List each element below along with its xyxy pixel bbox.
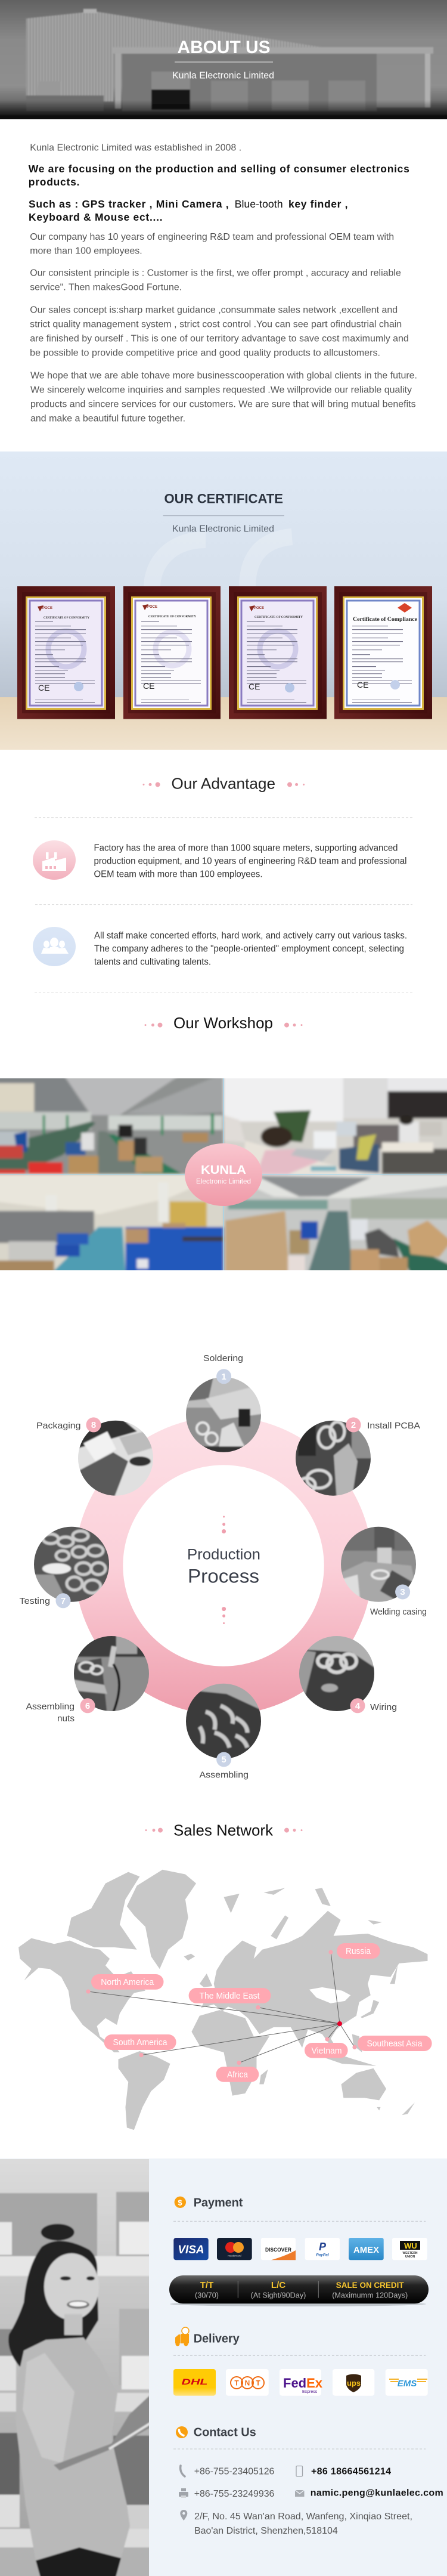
badges: step numbers: 1 [221,1372,226,1382]
smile [67,2300,89,2309]
heading: our workshop [144,1014,303,1032]
icon: mail [295,2490,304,2497]
panel: payment [169,2196,429,2306]
logo: tnt [226,2369,269,2396]
text block: staff [94,931,407,967]
connection lines [88,1952,355,2063]
logo: fedex: FedEx [283,2376,323,2391]
badges: step numbers: 7 [61,1596,66,1606]
heading: our advantage: Our Advantage [172,774,275,792]
badges: step numbers: 2 [351,1420,356,1430]
logo: ems: EMS [398,2379,417,2389]
terms bar: (At Sight/90Day) [251,2291,306,2300]
glow dividers [0,1078,447,1270]
labels: step names: Assembling [26,1702,74,1712]
certificate frame 4: CE [357,680,368,689]
region labels: South America [113,2038,167,2048]
text block: company introduction: and make a beautiful future together. [30,413,185,423]
card: paypal: P [319,2241,327,2253]
text block: company introduction: Our sales concept is:sharp market guidance ,consummate sales network ,excellent and [30,305,398,316]
card: visa [173,2238,209,2260]
logo: dhl: DHL [181,2377,207,2386]
arm and clipboard [54,2395,149,2470]
logo: dhl [173,2369,216,2396]
text block: factory: Factory has the area of more than 1000 square meters, supporting advanced [94,843,398,853]
icon: telephone [181,2466,185,2476]
card: discover: DISCOVER [265,2247,291,2253]
icon: location pin [180,2510,187,2521]
center title: production process: Process [188,1566,259,1587]
logo: ems [386,2369,428,2396]
photo step 2: install pcba [296,1421,371,1496]
text block: company introduction: be possible to provide competitive price and good quality products to allcustomers. [30,348,380,358]
badges: step numbers: 4 [355,1701,361,1711]
certificate frame 2: CE [143,681,154,691]
certificate frame 1 [17,586,115,719]
photo step 1: soldering [186,1378,261,1452]
certificate frame 1: CERTIFICATE OF CONFORMITY [44,617,89,620]
region labels: Russia [346,1947,371,1956]
shirt [16,2337,130,2560]
logo: fedex: Express [302,2390,318,2394]
region dots [86,1950,357,2065]
icon: people [33,927,76,966]
text block: company introduction: We hope that we are able tohave more businesscooperation with global clients in the future. [30,371,417,381]
card: mastercard [217,2238,252,2260]
terms bar: SALE ON CREDIT [336,2280,404,2290]
text block: staff: The company adheres to the "people-oriented" employment concept, selecting [94,944,404,954]
terms bar: T/T [200,2280,213,2290]
heading: payment: Payment [194,2196,243,2209]
face [44,2253,99,2320]
card: amex: AMEX [353,2245,379,2255]
certificate frame 1: CE [38,683,49,692]
terms bar [169,2275,429,2306]
icon: delivery truck [175,2327,189,2346]
photo: warehouse [0,1174,224,1273]
photo: assembly line [0,1074,224,1174]
text block: factory: production equipment, and 10 years of engineering R&D team and professional [94,856,406,867]
region labels: Vietnam [311,2046,342,2056]
text block: company introduction: key finder , [288,198,348,210]
certificate frame 3: CE [249,682,260,691]
heading: our advantage [143,774,305,792]
card: western union [392,2238,427,2260]
text block: company introduction: Keyboard & Mouse ect.... [29,211,163,223]
icon: factory [33,840,76,880]
ring [74,1417,372,1715]
shelves and boxes [0,2192,155,2576]
logo: tnt: T [256,2379,260,2387]
icon: mobile [296,2466,303,2476]
photo step 3: welding casing [341,1527,416,1602]
text block: factory: OEM team with more than 100 employees. [94,870,262,880]
heading: contact us: Contact Us [194,2426,256,2439]
labels: step names: Install PCBA [367,1421,420,1431]
hair [8,2224,98,2367]
logo badge: kunla: KUNLA [201,1164,246,1177]
text: email: namic.peng@kunlaelec.com [311,2488,443,2498]
icon: fax [179,2488,188,2498]
card: western union: WU [404,2241,417,2250]
logo: ups: ups [347,2379,361,2388]
header banner: about us [0,0,447,125]
text block: company introduction: Kunla Electronic Limited was established in 2008 . [30,143,241,153]
photo: woman with clipboard [0,2153,155,2576]
region labels: Southeast Asia [367,2039,423,2049]
text block: company introduction: Our consistent principle is : Customer is the first, we offer prompt , accuracy and reliable [30,268,401,278]
icon: contact phone [176,2426,188,2438]
certificate frame 4 [334,586,432,719]
text: address: Bao'an District, Shenzhen,518104 [194,2526,338,2536]
logo: tnt: T [234,2379,239,2387]
labels: step names [19,1353,427,1780]
text block: company introduction: Such as : GPS tracker , Mini Camera , [29,198,229,210]
logo badge: kunla [185,1143,262,1206]
text block: company introduction: strict quality management system , strict cost control .You can see part ofindustrial chain [30,320,402,330]
panel: contact us [173,2426,443,2536]
text: address: 2/F, No. 45 Wan'an Road, Wanfeng, Xinqiao Street, [194,2512,412,2522]
text block: staff: All staff make concerted efforts, hard work, and actively carry out various tasks. [94,931,407,941]
region labels: The Middle East [199,1991,260,2001]
badges: step numbers: 3 [400,1587,405,1597]
panel: our certificate [0,452,447,750]
photo step 8: packaging [78,1421,153,1496]
labels: step names: Assembling [199,1770,249,1780]
text block: company introduction: We are focusing on the production and selling of consumer electronics [29,163,409,175]
text block: company introduction: Our company has 10 years of engineering R&D team and professional OEM team with [30,232,394,242]
subtitle: company name: Kunla Electronic Limited [172,70,274,81]
certificate frame 2: POCE [147,605,157,609]
card: amex [349,2238,384,2260]
icon: payment [175,2197,186,2208]
card: mastercard: mastercard [228,2255,241,2257]
terms bar: (Maximumm 120Days) [332,2291,408,2300]
certificate frame 4: Certificate of Compliance [353,617,417,623]
badges: step numbers: 6 [85,1701,90,1711]
watermark: large CC letters [152,537,292,587]
photo step 4: wiring [299,1636,374,1711]
panel: footer background [0,2158,447,2576]
icon: payment: $ [178,2198,182,2207]
logo badge: kunla: Electronic Limited [196,1177,251,1185]
labels: step names: Welding casing [370,1607,427,1617]
labels: step names: Soldering [203,1353,243,1363]
labels: step names: nuts [57,1714,74,1724]
photo collage: workshop [0,1074,447,1273]
text: telephone: +86-755-23405126 [194,2467,274,2477]
text block: company introduction: We sincerely welcome inquiries and samples requested .We willprovide our reliable quality [30,385,412,395]
photo step 5: assembling [186,1683,261,1758]
heading: our workshop: Our Workshop [173,1014,273,1032]
labels: step names: Wiring [370,1702,397,1712]
badges: step numbers: 8 [91,1420,96,1430]
photo step 7: testing [34,1527,109,1602]
region labels [91,1943,432,2082]
card: western union: UNION [405,2255,415,2259]
text block: company introduction: products and sincere services for our customers. We are sure that will bring mutual benefits [30,400,416,409]
heading: delivery: Delivery [194,2332,240,2345]
center title: production process [187,1516,260,1624]
terms bar: L/C [271,2280,285,2290]
panel: advantages list [33,818,412,992]
heading: our certificate: OUR CERTIFICATE [164,491,283,506]
card: visa: VISA [178,2244,204,2256]
certificate frame 2: CERTIFICATE OF CONFORMITY [148,616,196,619]
photo step 6: assembling nuts [74,1636,149,1711]
text block: company introduction [29,143,417,423]
center title: production process: Production [187,1546,260,1563]
badges: step numbers: 5 [221,1755,226,1765]
text block: company introduction: Blue-tooth [235,198,283,210]
card: discover [261,2238,296,2260]
heading: sales network: Sales Network [173,1821,274,1839]
heading: sales network [145,1821,303,1839]
photo: office [224,1074,447,1176]
pants [36,2547,121,2576]
text block: factory [94,843,406,880]
region labels: North America [101,1978,154,1987]
card: western union: WESTERN [403,2252,418,2255]
certificate frame 1: POCE [42,607,52,610]
subtitle: company name: Kunla Electronic Limited [172,524,274,534]
text block: company introduction: more than 100 employees. [30,246,142,256]
text block: company introduction: products. [29,176,79,188]
text: mobile: +86 18664561214 [311,2467,391,2477]
certificate frame 3: POCE [254,607,264,610]
region labels: Africa [227,2070,249,2080]
certificate frame 2 [123,586,221,719]
text block: company introduction: are finished by ourself . This is one of our territory advantage to save cost maximumly and [30,334,409,344]
certificate frame 3 [229,586,327,719]
text block: staff: talents and cultivating talents. [94,957,211,967]
card: paypal: PayPal [316,2253,329,2257]
photo: packing line [224,1174,447,1273]
logo: fedex [280,2369,323,2396]
card: paypal [305,2238,340,2260]
labels: step names: Packaging [36,1421,81,1431]
certificate frame 3: CERTIFICATE OF CONFORMITY [254,616,303,619]
badges: step numbers [56,1369,410,1767]
chart: world map sales network [18,1870,432,2130]
text: fax: +86-755-23249936 [194,2489,274,2499]
panel: delivery [173,2327,428,2396]
diagram: production process [19,1353,427,1780]
text: address [194,2512,412,2536]
logo: ups [333,2369,374,2396]
terms bar: (30/70) [195,2291,219,2300]
hub dot: shenzhen [337,2021,342,2026]
text block: company introduction: service". Then makesGood Fortune. [30,282,182,292]
labels: step names: Testing [19,1596,50,1606]
logo: tnt: N [245,2379,250,2387]
heading: about us: ABOUT US [178,38,271,57]
map landmasses [18,1870,427,2130]
